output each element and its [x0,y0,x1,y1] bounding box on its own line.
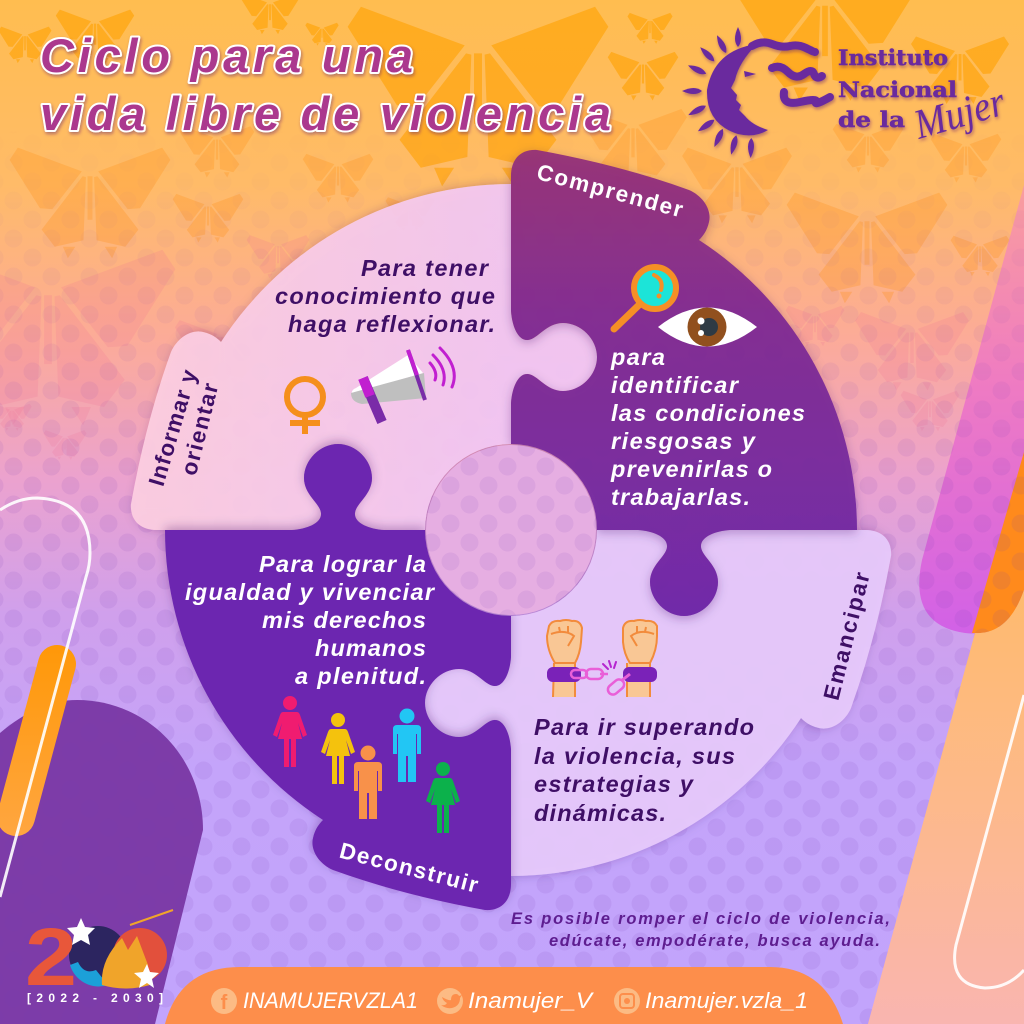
decorative white outline in peach band [955,695,1024,988]
footnote: edúcate, empodérate, busca ayuda. [549,932,880,950]
text: comprender: prevenirlas o [610,456,772,482]
text: informar: haga reflexionar. [288,311,495,337]
text: deconstruir: mis derechos [262,607,426,633]
icon: waves [752,42,830,103]
footer handle: instagram: Inamujer.vzla_1 [645,988,808,1013]
panel: deconstruir [165,444,511,910]
text: comprender: trabajarlas. [611,484,750,510]
logo wordmark [838,45,957,132]
panel: comprender [511,150,857,616]
background butterflies [0,0,1009,460]
icon: female symbol [287,379,323,434]
text: emancipar [534,714,754,826]
text: comprender [610,344,805,510]
tab label: Emancipar: Emancipar [819,569,875,703]
peach band lower part covering the dots [868,590,1024,1024]
puzzle circle [131,150,891,910]
text: deconstruir: a plenitud. [295,663,426,689]
icon: twitter [437,988,463,1014]
text: deconstruir: humanos [315,635,426,661]
tab label: Informar y orientar: orientar [176,380,223,478]
icon: facebook [211,988,237,1014]
dot pattern [0,314,1024,1024]
logo wordmark: Instituto [838,45,948,70]
footer bar [165,967,843,1024]
logo script word: Mujer [908,79,1011,149]
text: comprender: para [610,344,665,370]
icon: facebook: f [221,992,228,1014]
text: deconstruir: igualdad y vivenciar [185,579,436,605]
title [40,29,611,140]
logo: bicentennial 200: 2 [25,912,77,1003]
text: emancipar: la violencia, sus [534,743,735,769]
icon: instagram [614,988,640,1014]
title: Ciclo para una [40,29,413,82]
footer handle: twitter: Inamujer_V [468,988,595,1013]
logo: Instituto Nacional de la Mujer [682,27,1011,158]
text: deconstruir [185,551,436,689]
decorative peach diagonal band [868,455,1024,1024]
title: vida libre de violencia [40,87,611,140]
text: informar: conocimiento que [275,283,495,309]
decorative purple pill bottom left [0,700,203,1024]
center hole [426,445,596,615]
text: comprender: riesgosas y [611,428,757,454]
text: informar [275,255,495,337]
logo wordmark: Nacional [838,77,957,102]
text: deconstruir: Para lograr la [259,551,426,577]
text: informar: Para tener [361,255,490,281]
logo: bicentennial 200 [25,910,173,1005]
icon: megaphone [351,348,454,422]
tab label: Comprender: Comprender [534,159,686,222]
panel: emancipar [425,530,891,876]
logo: bicentennial 200: [2022 - 2030] [27,991,163,1005]
footnote: Es posible romper el ciclo de violencia, [511,910,890,928]
icon: fists breaking chain [547,620,657,697]
panel: informar y orientar [131,184,597,530]
tab label: Informar y orientar: Informar y [144,366,202,489]
icon: magnifying glass [614,267,676,329]
decorative orange pill left [16,664,57,817]
text: comprender: las condiciones [611,400,805,426]
icon: eye [658,308,757,346]
text: emancipar: Para ir superando [534,714,754,740]
decorative white outline pill left [0,498,90,897]
footnote [511,910,890,950]
decorative pink diagonal pill [919,185,1024,633]
tab label: Deconstruir: Deconstruir [337,838,481,898]
text: emancipar: dinámicas. [534,800,666,826]
text: comprender: identificar [611,372,740,398]
footer handle: facebook: INAMUJERVZLA1 [243,988,418,1013]
logo wordmark: de la [838,107,905,132]
text: emancipar: estrategias y [534,771,695,797]
icon: group of people [273,696,460,833]
icon: crescent sun [682,27,768,158]
